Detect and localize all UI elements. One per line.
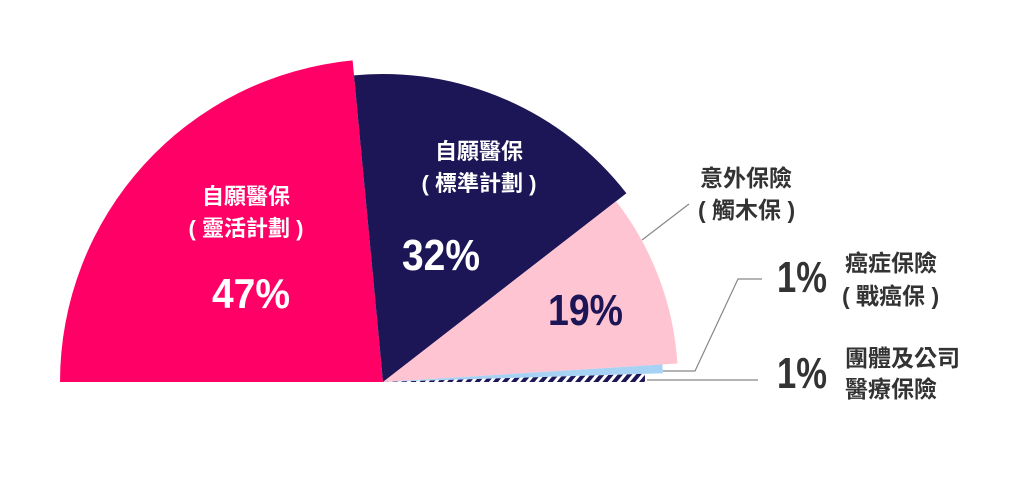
slice: cancer 1% [383, 364, 663, 382]
label: group 1%: 團體及公司 [845, 345, 960, 371]
label: accident insurance [698, 165, 795, 223]
label: group 1%: 醫療保險 [845, 376, 937, 402]
label: group 1%: 1% [777, 349, 827, 398]
label: cancer 1%: 癌症保險 [845, 250, 937, 276]
slice: voluntary standard 32%: ( 標準計劃 ) [422, 171, 536, 196]
label: cancer 1% [777, 250, 939, 309]
label: flexible plan: 自願醫保 [202, 184, 290, 209]
value: 32%: 32% [402, 231, 480, 280]
label: group 1% [777, 345, 960, 402]
value: 47%: 47% [212, 270, 290, 317]
slice: voluntary flexible 47% [60, 60, 383, 382]
slice: voluntary flexible 47%: ( 靈活計劃 ) [189, 216, 303, 241]
value: 19%: 19% [548, 286, 623, 335]
slice: voluntary standard 32%: 自願醫保 [435, 139, 523, 164]
label: cancer 1%: ( 戰癌保 ) [842, 283, 939, 309]
leader lines [642, 204, 762, 380]
label: accident insurance: ( 觸木保 ) [698, 197, 795, 223]
slice: group 1% [383, 374, 645, 382]
label: accident insurance: 意外保險 [700, 165, 792, 191]
label: cancer 1%: 1% [777, 253, 827, 302]
slice: accident 19% [383, 201, 677, 382]
slice: voluntary standard 32% [354, 74, 626, 382]
